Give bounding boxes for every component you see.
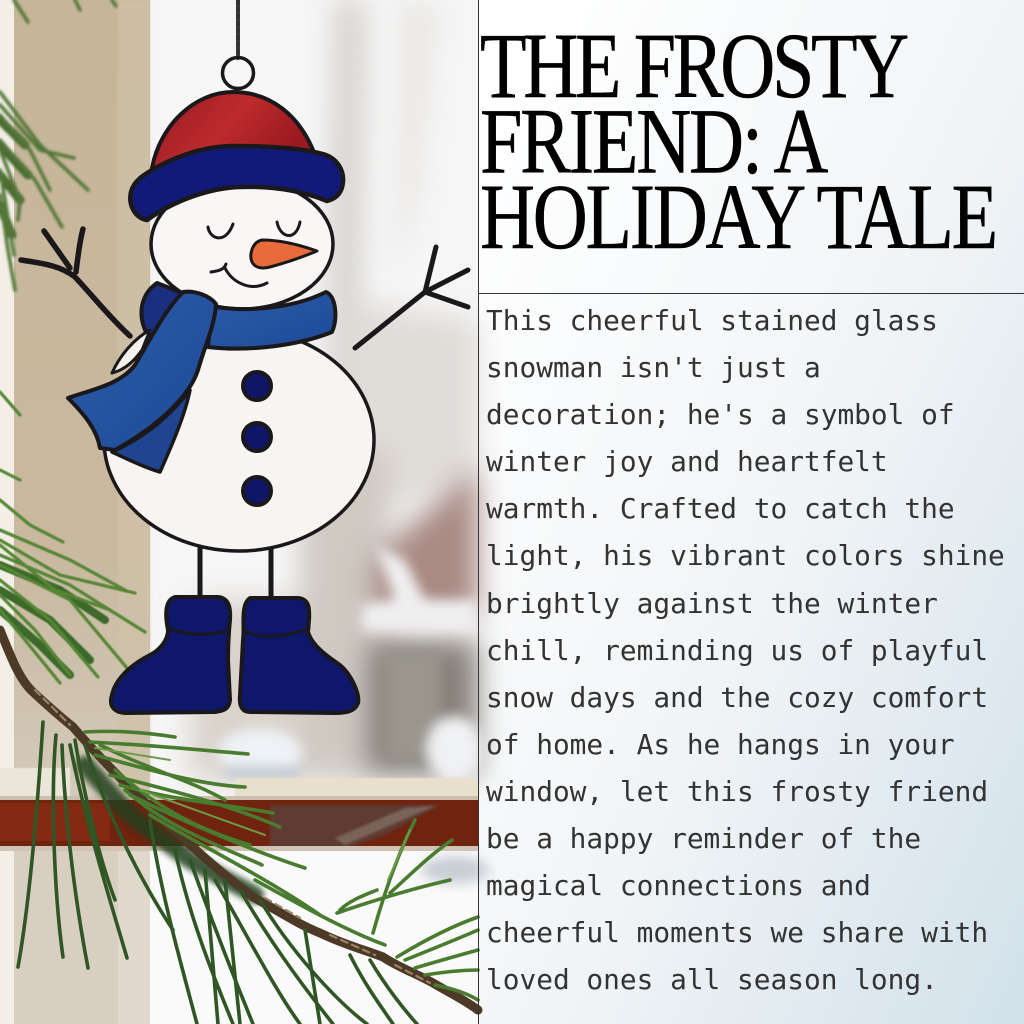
scarf tail — [68, 292, 216, 450]
legs — [200, 545, 271, 600]
chain and ring — [222, 0, 254, 88]
needles mid — [85, 731, 478, 1000]
right arm — [355, 247, 468, 348]
branch: bottom main — [0, 630, 478, 1024]
eyes — [208, 222, 300, 238]
pine branches — [0, 0, 478, 1024]
title: HOLIDAY TALE — [480, 166, 998, 269]
hat brim — [130, 146, 343, 220]
scarf lower tail — [112, 390, 190, 472]
twig — [0, 630, 478, 1010]
window ledge — [0, 768, 70, 798]
head — [151, 179, 333, 309]
panel: text background — [478, 0, 1024, 1024]
panel: photo background — [0, 0, 489, 1024]
scarf back — [141, 283, 200, 345]
title — [480, 15, 998, 269]
divider lines — [478, 0, 1024, 1024]
wall and frame — [0, 0, 14, 1024]
lower dark needle mass — [85, 765, 255, 895]
smile — [211, 264, 267, 286]
buttons — [243, 372, 271, 505]
title: THE FROSTY — [480, 15, 909, 118]
body text: This cheerful stained glass snowman isn't just a decoration; he's a symbol of winter joy and heartfelt warmth. Crafted to catch the light, his vibrant colors shine brightly against the winter chill, reminding us of playful snow days and the cozy comfort of home. As he hangs in your window, let this frosty friend be a happy reminder of the magical connections and cheerful moments we share with loved ones all season long. — [486, 304, 1005, 996]
title: FRIEND: A — [480, 90, 829, 193]
body sliver — [112, 330, 150, 373]
needles dark — [18, 722, 417, 1024]
nose — [251, 240, 317, 268]
snowman ornament — [21, 0, 468, 713]
right boot — [240, 598, 358, 713]
branch: middle left — [0, 392, 145, 683]
left boot — [111, 597, 230, 713]
twig highlights — [35, 690, 430, 983]
left arm — [21, 229, 130, 336]
hat dome — [152, 92, 315, 168]
scarf band — [208, 292, 335, 349]
branch: top left — [0, 0, 116, 290]
body — [104, 329, 374, 551]
